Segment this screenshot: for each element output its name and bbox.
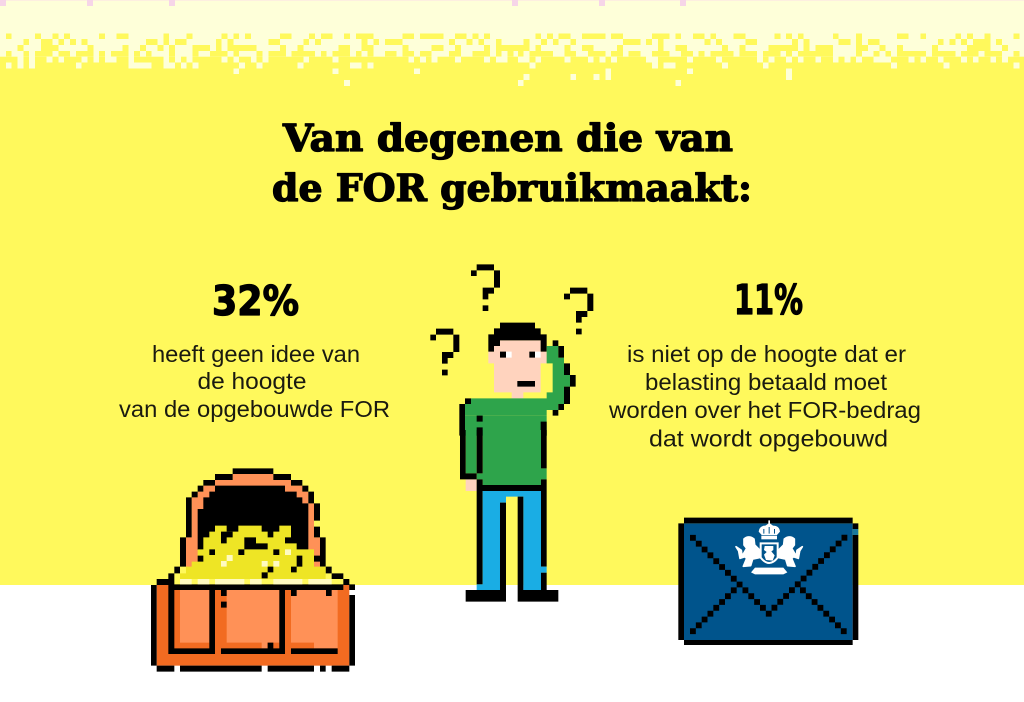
text: 32% description: de hoogte (198, 368, 306, 394)
text: 11% description: belasting betaald moet (645, 369, 888, 395)
icon: blue envelope (678, 518, 858, 645)
motto banner (751, 568, 787, 574)
figure: confused man (459, 323, 576, 602)
icon: treasure chest with gold (151, 468, 355, 672)
pixel dissolve band: right half (512, 36, 1019, 83)
text: 32% description: van de opgebouwde FOR (119, 396, 390, 422)
icon: Dutch royal coat of arms (736, 520, 802, 574)
pixel dissolve band: left half (6, 36, 513, 83)
text: 11% description: dat wordt opgebouwd (649, 426, 888, 452)
torso and legs (460, 430, 558, 602)
shield (761, 543, 778, 563)
head and raised arm (459, 323, 576, 436)
text: 11% description (608, 341, 921, 452)
crown (759, 520, 780, 539)
chest lid (157, 468, 355, 590)
title (272, 116, 752, 210)
statistic: 11%: 11% (734, 276, 803, 324)
title: de FOR gebruikmaakt: (272, 166, 752, 210)
title: Van degenen die van (282, 116, 733, 160)
text: 32% description (119, 341, 390, 422)
text: 11% description: worden over het FOR-bedrag (608, 397, 921, 423)
text: 11% description: is niet op de hoogte dat er (627, 341, 906, 367)
chest body (151, 584, 355, 672)
gold coins (180, 526, 332, 584)
text: 32% description: heeft geen idee van (152, 341, 360, 367)
icon: question marks (430, 264, 593, 375)
envelope flap and fold lines (690, 538, 847, 631)
left lion (736, 537, 761, 566)
statistic: 32%: 32% (212, 277, 299, 325)
right lion (778, 537, 802, 566)
